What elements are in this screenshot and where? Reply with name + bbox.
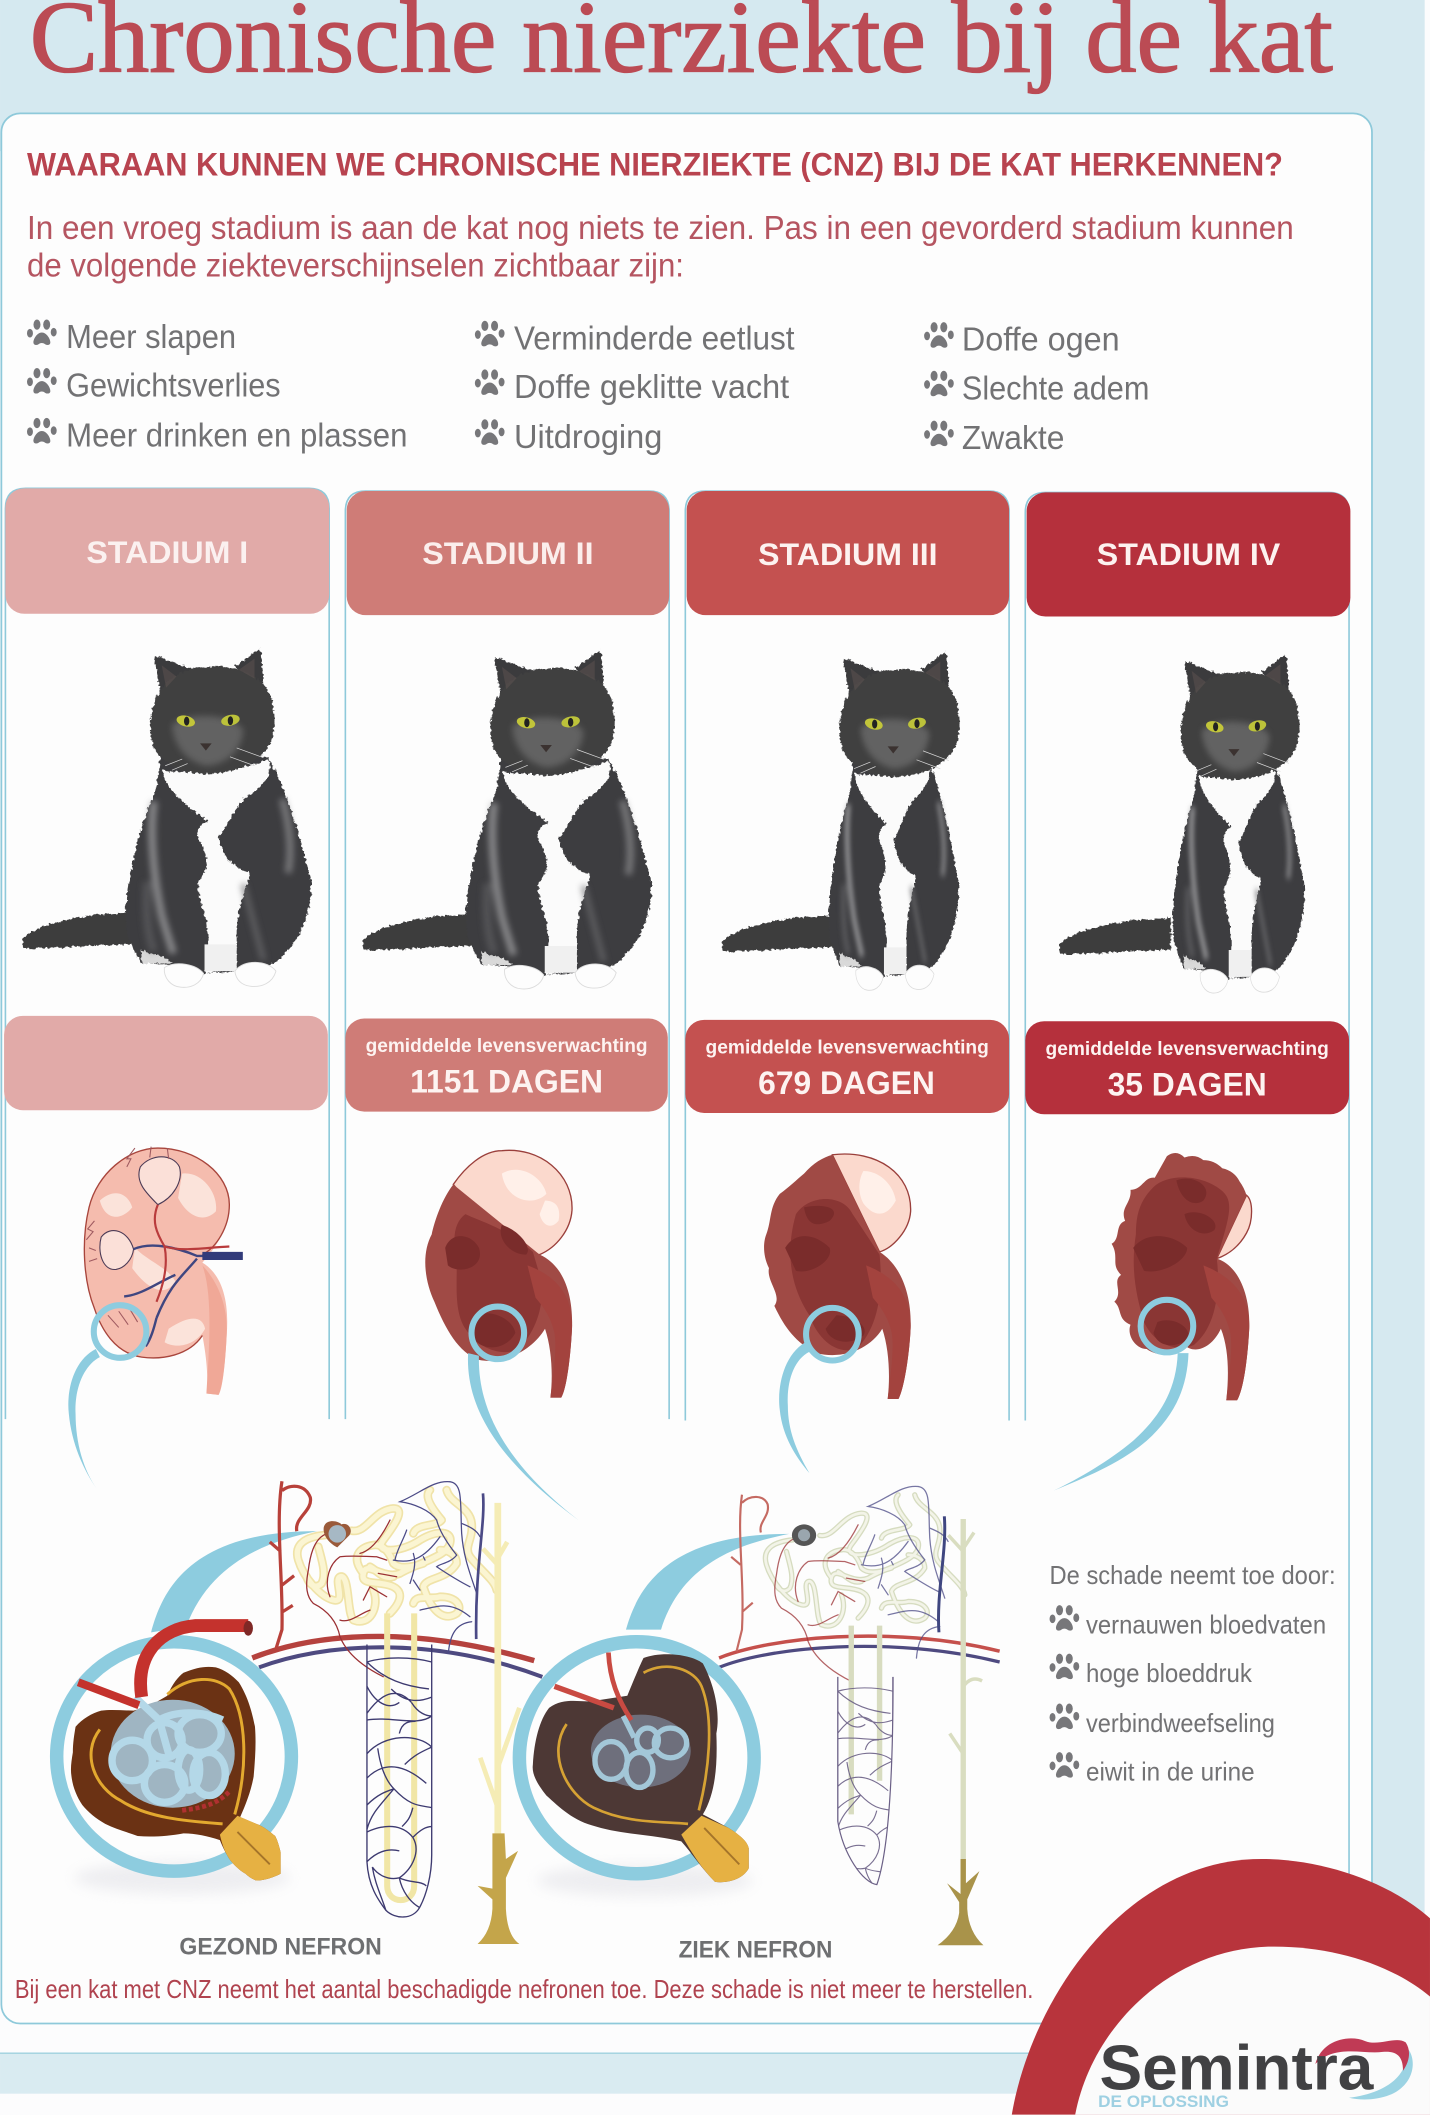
item: verbindweefseling: verbindweefseling (1086, 1710, 1275, 1738)
photo: cat stage I (22, 649, 311, 987)
list: de schade neemt toe door (1050, 1562, 1336, 1787)
item: verbindweefseling (1050, 1704, 1275, 1738)
loop net (838, 1626, 893, 1900)
photo: cat stage IV (1059, 654, 1305, 993)
afferent vessel (731, 1495, 768, 1651)
header: stadium II (347, 491, 669, 615)
life expectancy: 679 dagen: 679 DAGEN (758, 1065, 935, 1101)
magnified glomerulus ring (519, 1534, 789, 1874)
life expectancy: 679 dagen: gemiddelde levensverwachting (706, 1037, 989, 1059)
life expectancy: 1151 dagen (345, 1019, 668, 1112)
coil (591, 1715, 691, 1787)
symptom: Doffe ogen: Doffe ogen (962, 321, 1120, 359)
diagram: diseased nephron (519, 1486, 1000, 1945)
glomerulus small (324, 1521, 351, 1547)
logo: Semintra: Semintra (1099, 2034, 1374, 2104)
item: vernauwen bloedvaten (1050, 1605, 1326, 1640)
item: eiwit in de urine: eiwit in de urine (1086, 1759, 1255, 1787)
life expectancy: 35 dagen (1025, 1021, 1349, 1114)
tubules and peritubular vessels (297, 1482, 497, 1677)
photo: cat stage III (722, 652, 960, 990)
intro paragraph: In een vroeg stadium is aan de kat nog niets te zien. Pas in een gevorderd stadium kunnen (27, 209, 1294, 247)
magnifier ring and pointer: stage II (468, 1307, 579, 1520)
photo: cat stage II (363, 650, 651, 989)
diagram: healthy nephron (57, 1481, 542, 1944)
kidney: healthy stage I (84, 1147, 243, 1395)
panel: stadium III (685, 491, 1009, 1421)
panel: stadium I (4, 488, 329, 1419)
life expectancy: 1151 dagen: 1151 DAGEN (410, 1064, 603, 1100)
label: gezond nefron: GEZOND NEFRON (179, 1934, 382, 1961)
label: ziek nefron: ZIEK NEFRON (679, 1936, 832, 1963)
symptom: Meer slapen: Meer slapen (66, 318, 236, 356)
kidney: stage III (764, 1154, 911, 1399)
collecting duct (478, 1503, 519, 1944)
magnifier ring and pointer: stage I (68, 1305, 146, 1489)
collecting duct (938, 1519, 983, 1945)
list heading: De schade neemt toe door: (1050, 1562, 1336, 1590)
symptom: Slechte adem: Slechte adem (962, 369, 1149, 407)
symptom: Verminderde eetlust: Verminderde eetlust (514, 319, 795, 357)
logo: Semintra: DE OPLOSSING (1098, 2092, 1229, 2111)
loop net (367, 1613, 432, 1917)
magnified glomerulus ring (57, 1531, 317, 1871)
capsule (533, 1654, 749, 1882)
header: stadium IV (1027, 492, 1350, 617)
symptom: Zwakte: Zwakte (962, 419, 1064, 457)
life expectancy: 679 dagen (685, 1020, 1009, 1113)
tubules and peritubular vessels (765, 1486, 965, 1681)
item: vernauwen bloedvaten: vernauwen bloedvaten (1086, 1612, 1326, 1640)
red arc corner with logo (1012, 1859, 1430, 2115)
life expectancy: 35 dagen: 35 DAGEN (1108, 1066, 1267, 1102)
arteries (78, 1621, 253, 1705)
header: stadium I (5, 488, 329, 614)
symptom: Gewichtsverlies: Gewichtsverlies (66, 367, 281, 405)
header: stadium II: STADIUM II (422, 536, 594, 571)
footnote: Bij een kat met CNZ neemt het aantal beschadigde nefronen toe. Deze schade is niet meer te herstellen. (15, 1976, 1033, 2004)
header: stadium III (687, 491, 1009, 615)
coil (111, 1697, 235, 1810)
symptom: Meer drinken en plassen: Meer drinken en plassen (66, 417, 407, 455)
header: stadium IV: STADIUM IV (1097, 537, 1281, 572)
afferent vessel (270, 1481, 311, 1651)
panel: stadium II (345, 491, 669, 1419)
life expectancy: 35 dagen: gemiddelde levensverwachting (1046, 1038, 1329, 1060)
header: stadium III: STADIUM III (758, 537, 938, 572)
vessel arcs (719, 1636, 1000, 1667)
magnifier ring and pointer: stage III (779, 1308, 859, 1473)
kidney: stage IV (1112, 1153, 1252, 1400)
glomerulus small (792, 1524, 816, 1546)
symptoms list (27, 318, 1149, 457)
magnifier ring and pointer: stage IV (1054, 1300, 1193, 1491)
empty life expectancy pill (4, 1016, 328, 1110)
vessel arcs (252, 1636, 542, 1677)
kidney: stage II (425, 1150, 572, 1398)
intro paragraph: de volgende ziekteverschijnselen zichtbaar zijn: (27, 247, 684, 285)
life expectancy: 1151 dagen: gemiddelde levensverwachting (366, 1035, 648, 1057)
panel: stadium IV (1025, 492, 1350, 1889)
symptom: Uitdroging: Uitdroging (514, 418, 662, 456)
item: eiwit in de urine (1050, 1752, 1255, 1787)
symptom: Doffe geklitte vacht: Doffe geklitte vacht (514, 368, 790, 406)
capsule (71, 1667, 281, 1881)
header: stadium I: STADIUM I (86, 535, 248, 570)
arteries (554, 1653, 631, 1720)
heading: waaraan herkennen: WAARAAN KUNNEN WE CHRONISCHE NIERZIEKTE (CNZ) BIJ DE KAT HERKENNEN? (27, 146, 1283, 182)
item: hoge bloeddruk (1050, 1654, 1252, 1688)
item: hoge bloeddruk: hoge bloeddruk (1086, 1660, 1252, 1688)
intro paragraph (27, 209, 1294, 285)
